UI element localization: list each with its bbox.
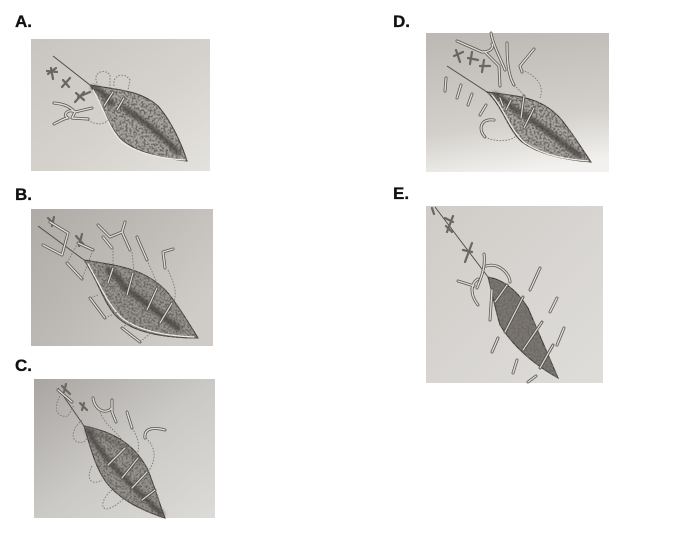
label D: D. — [393, 12, 410, 31]
label C: C. — [15, 356, 32, 375]
panel E: suture illustration — [426, 206, 603, 383]
panel D: suture illustration — [426, 33, 609, 172]
wound C — [84, 426, 165, 518]
label A: A. — [15, 12, 32, 31]
stitches and knots E — [432, 208, 564, 382]
interrupted mattress stitches B — [43, 217, 175, 342]
panel A: suture illustration — [31, 39, 210, 171]
knots and thread ends A — [47, 68, 92, 124]
wound B — [84, 260, 198, 338]
stitches and knots C — [56, 384, 165, 509]
panel B: suture illustration — [31, 209, 213, 346]
wound D — [487, 92, 591, 162]
panel C: suture illustration — [34, 379, 215, 518]
wound E — [488, 277, 558, 378]
stitches and knots D — [445, 33, 541, 141]
label B: B. — [15, 185, 32, 204]
label E: E. — [393, 184, 409, 203]
wound A — [90, 85, 187, 161]
